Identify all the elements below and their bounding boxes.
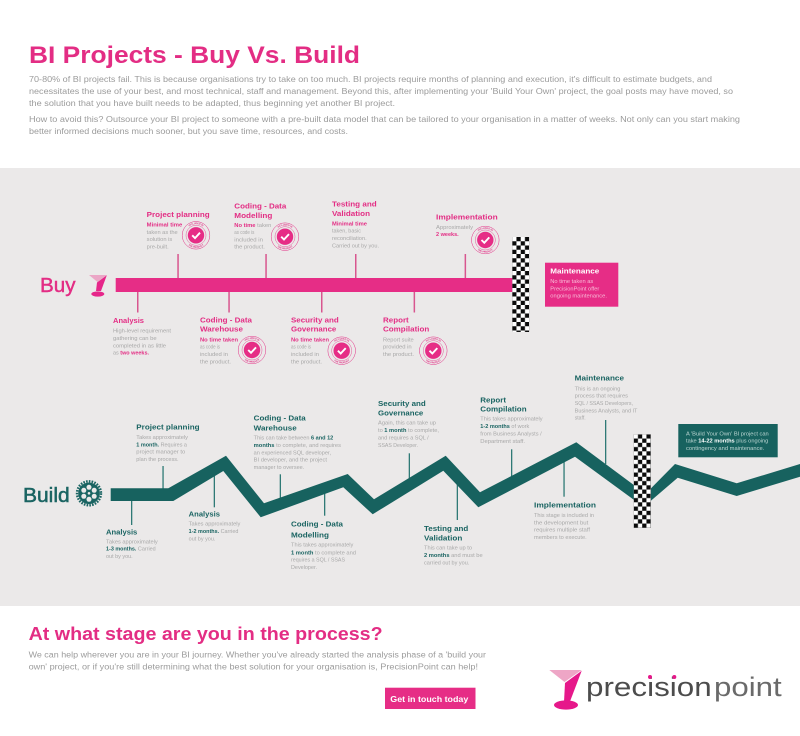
intro paragraph 2: How to avoid this? Outsource your BI project to someone with a pre-built data model that can be tailored to your organisation in a matter of weeks. Not only can you start making: [29, 114, 740, 124]
icon: included badge: INCLUDED IN: [244, 337, 260, 342]
step: analysis 2: [189, 509, 241, 542]
icon: included badge: [471, 226, 500, 254]
intro paragraph 1: 70-80% of BI projects fail. This is because organisations try to take on too much. BI projects require months of planning and execution, it's difficult to estimate budgets, and: [29, 74, 712, 84]
step: testing and validation: [332, 200, 379, 250]
step: project planning: Project planning: [136, 423, 200, 432]
logo: precisionpoint: [549, 670, 782, 710]
step: testing and validation: 2 months and must be: [424, 553, 483, 559]
step: testing and validation: carried out by you.: [424, 560, 469, 566]
step: project planning: Project planning: [147, 210, 210, 219]
step: implementation: Implementation: [436, 212, 498, 221]
step: coding data warehouse: This can take between 6 and 12: [254, 436, 333, 442]
panel: build timeline: [23, 374, 800, 571]
step: project planning: [146, 210, 210, 250]
step: security and governance: to 1 month to complete,: [378, 428, 440, 434]
step: security and governance: and requires a SQL /: [378, 436, 429, 442]
step: coding data warehouse: manager to oversee.: [254, 465, 304, 471]
step: analysis 2: 1-2 months. Carried: [189, 529, 238, 535]
step: security and governance: No time taken: [291, 337, 329, 343]
step: report compilation: 1-2 months of work: [480, 424, 530, 430]
step: implementation: the development but: [534, 520, 589, 526]
step: security and governance: Security and: [291, 315, 339, 324]
step: implementation: requires multiple staff: [534, 528, 591, 534]
step: coding data warehouse: BI developer, and the project: [254, 458, 328, 464]
step: coding data modelling: [291, 520, 356, 571]
step: security and governance: included in: [291, 352, 319, 358]
step: coding data modelling: requires a SQL / SSAS: [291, 558, 345, 564]
step: project planning: project manager to: [136, 450, 185, 456]
icon: included badge: [328, 336, 356, 365]
step: analysis 2: Analysis: [189, 509, 220, 518]
step: implementation: members to execute.: [534, 535, 587, 541]
step: project planning: plan the process.: [136, 457, 179, 463]
step: coding data modelling: 1 month to complete and: [291, 550, 356, 556]
step: analysis: gathering can be: [113, 336, 157, 342]
step: coding data warehouse: an experienced SQL developer,: [254, 450, 332, 456]
intro paragraph 1: [29, 74, 733, 108]
step: coding data warehouse: Coding - Data: [200, 315, 253, 324]
step: coding data modelling: Modelling: [234, 211, 273, 220]
step: coding data modelling: the product.: [234, 245, 265, 251]
step: report compilation: This takes approximately: [480, 417, 543, 423]
step: report compilation: Report suite: [383, 337, 414, 343]
checkered finish flag: [634, 434, 651, 528]
step: analysis 1: Takes approximately: [106, 539, 158, 545]
step: project planning: [136, 423, 200, 463]
step: implementation: [534, 501, 596, 541]
title: BI Projects - Buy Vs. Build: [29, 42, 360, 69]
step: report compilation: the product.: [383, 352, 414, 358]
icon: included badge: [270, 222, 300, 251]
step: testing and validation: Carried out by you.: [332, 244, 379, 250]
step: coding data modelling: This takes approximately: [291, 543, 354, 549]
icon: included badge: THE PRODUCT: [334, 359, 349, 364]
step: maintenance: process that requires: [575, 394, 628, 400]
step: report compilation: provided in: [383, 345, 412, 351]
intro paragraph 1: necessitates the use of your best, and most technical, staff and management. Beyond this, after implementing your 'Build Your Own' project, the goal posts may have moved, so: [29, 86, 733, 96]
step: analysis: High-level requirement: [113, 329, 172, 335]
callout: maintenance: ongoing maintenance.: [550, 294, 607, 300]
step: testing and validation: This can take up to: [424, 546, 472, 552]
step: coding data warehouse: as code is: [200, 345, 220, 351]
icon: included badge: INCLUDED IN: [334, 338, 350, 342]
step: security and governance: [378, 399, 440, 449]
icon: included badge: INCLUDED IN: [188, 222, 204, 226]
buy label: Buy: [40, 275, 76, 297]
icon: included badge: INCLUDED IN: [277, 224, 293, 228]
step: coding data warehouse: the product.: [200, 359, 231, 365]
step: coding data modelling: [234, 201, 300, 251]
panel: timeline background: [0, 168, 800, 606]
icon: included badge: [238, 336, 266, 364]
step: report compilation: Report: [480, 395, 506, 404]
step: security and governance: [291, 315, 356, 365]
step: security and governance: Governance: [291, 325, 336, 334]
step: testing and validation: Validation: [424, 533, 463, 542]
step: project planning: taken as the: [147, 230, 178, 236]
callout: build duration: take 14-22 months plus ongoing: [686, 439, 768, 445]
step: coding data warehouse: [254, 413, 341, 471]
step: project planning: 1 month. Requires a: [136, 442, 187, 448]
step: analysis 2: out by you.: [189, 536, 215, 542]
step: implementation: 2 weeks.: [436, 232, 459, 238]
step: testing and validation: reconciliation.: [332, 236, 367, 242]
step: analysis: completed in as little: [113, 343, 166, 349]
step: analysis: as two weeks.: [113, 351, 149, 357]
icon: cocktail glass: [89, 275, 107, 297]
callout: build duration: [678, 424, 778, 457]
step: coding data modelling: Modelling: [291, 531, 329, 540]
step: coding data warehouse: No time taken: [200, 337, 238, 343]
step: coding data warehouse: Warehouse: [200, 325, 243, 334]
step: coding data warehouse: included in: [200, 352, 228, 358]
step: report compilation: [480, 395, 543, 445]
step: report compilation: Compilation: [383, 325, 430, 334]
icon: gear: [77, 481, 101, 505]
step: testing and validation: [424, 524, 483, 566]
step: coding data modelling: Developer.: [291, 565, 317, 571]
step: implementation: Implementation: [534, 501, 596, 510]
step: coding data modelling: Coding - Data: [234, 201, 287, 210]
step: maintenance: This is an ongoing: [575, 386, 620, 392]
step: testing and validation: Testing and: [332, 200, 377, 209]
step: analysis: [113, 316, 172, 357]
icon: included badge: THE PRODUCT: [278, 245, 292, 250]
step: coding data warehouse: [200, 315, 266, 365]
step: analysis 1: 1-3 months. Carried: [106, 547, 156, 553]
intro paragraph 2: [29, 114, 740, 136]
step: maintenance: Business Analysts, and IT: [575, 408, 638, 414]
stems: [137, 254, 466, 312]
icon: included badge: THE PRODUCT: [188, 244, 204, 248]
logo: precisionpoint: precision: [586, 672, 712, 702]
step: analysis 1: out by you.: [106, 554, 133, 560]
icon: included badge: [419, 336, 448, 365]
icon: included badge: INCLUDED IN: [478, 227, 493, 232]
step: report compilation: [383, 315, 448, 365]
stems: [131, 420, 606, 525]
step: report compilation: from Business Analysts /: [480, 432, 542, 438]
step: project planning: Minimal time: [147, 223, 182, 229]
step: report compilation: Compilation: [480, 405, 527, 414]
button: get in touch: Get in touch today: [390, 694, 469, 704]
step: analysis 2: Takes approximately: [189, 522, 241, 528]
icon: included badge: THE PRODUCT: [478, 248, 492, 253]
step: analysis 1: Analysis: [106, 527, 137, 536]
step: analysis: Analysis: [113, 316, 144, 325]
step: coding data modelling: as code is: [234, 230, 255, 236]
callout: build duration: contingency and maintenance.: [686, 446, 764, 452]
intro paragraph 1: the solution that you have built needs to be adapted, thus beginning yet another BI project.: [29, 98, 395, 108]
icon: included badge: THE PRODUCT: [426, 359, 440, 364]
step: coding data warehouse: Warehouse: [254, 423, 297, 432]
logo: precisionpoint: point: [714, 672, 782, 702]
step: project planning: pre-built.: [147, 244, 169, 250]
step: project planning: solution is: [147, 237, 173, 243]
build label: Build: [23, 485, 70, 507]
step: testing and validation: Minimal time: [332, 221, 367, 227]
step: project planning: Takes approximately: [136, 435, 188, 441]
step: security and governance: Governance: [378, 408, 423, 417]
step: implementation: Approximately: [436, 225, 473, 231]
step: testing and validation: Validation: [332, 209, 370, 218]
step: testing and validation: taken, basic: [332, 229, 361, 235]
callout: maintenance: Maintenance: [550, 267, 599, 276]
closing text: [29, 650, 486, 672]
step: testing and validation: Testing and: [424, 524, 469, 533]
button: get in touch: [385, 688, 476, 709]
step: security and governance: SSAS Developer.: [378, 443, 418, 449]
step: coding data modelling: included in: [234, 237, 263, 243]
step: maintenance: [575, 374, 638, 422]
step: coding data modelling: No time taken: [234, 223, 271, 229]
step: report compilation: Department staff.: [480, 439, 525, 445]
step: security and governance: Again, this can take up: [378, 421, 436, 427]
step: coding data modelling: Coding - Data: [291, 520, 344, 529]
callout: maintenance: PrecisionPoint offer: [550, 286, 600, 292]
step: report compilation: Report: [383, 315, 409, 324]
step: maintenance: Maintenance: [575, 374, 624, 383]
buy timeline bar: [116, 278, 513, 292]
build timeline zigzag: [111, 442, 800, 517]
step: maintenance: SQL / SSAS Developers,: [575, 401, 633, 407]
icon: included badge: THE PRODUCT: [244, 358, 260, 363]
panel: buy timeline: [40, 200, 618, 365]
step: coding data warehouse: months to complete, and requires: [254, 443, 341, 449]
step: security and governance: the product.: [291, 359, 322, 365]
closing text: We can help wherever you are in your BI journey. Whether you've already started the analysis phase of a 'build your: [29, 650, 486, 660]
step: security and governance: Security and: [378, 399, 426, 408]
heading: at what stage: At what stage are you in the process?: [29, 624, 383, 644]
step: implementation: [436, 212, 500, 254]
checkered finish flag: [512, 237, 529, 332]
intro paragraph 2: better informed decisions much sooner, but you save time, resources, and costs.: [29, 126, 348, 136]
icon: included badge: INCLUDED IN: [426, 338, 441, 342]
step: analysis 1: [106, 527, 158, 560]
step: security and governance: as code is: [291, 345, 311, 351]
step: maintenance: staff.: [575, 416, 586, 422]
callout: build duration: A 'Build Your Own' BI project can: [686, 431, 769, 437]
closing text: own' project, or if you're still determining what the best solution for your organisation is, PrecisionPoint can help!: [29, 662, 478, 672]
callout: maintenance: [545, 263, 618, 307]
callout: maintenance: No time taken as: [550, 279, 594, 285]
step: implementation: This stage is included in: [534, 513, 594, 519]
step: coding data warehouse: Coding - Data: [254, 413, 307, 422]
icon: included badge: [182, 221, 210, 250]
